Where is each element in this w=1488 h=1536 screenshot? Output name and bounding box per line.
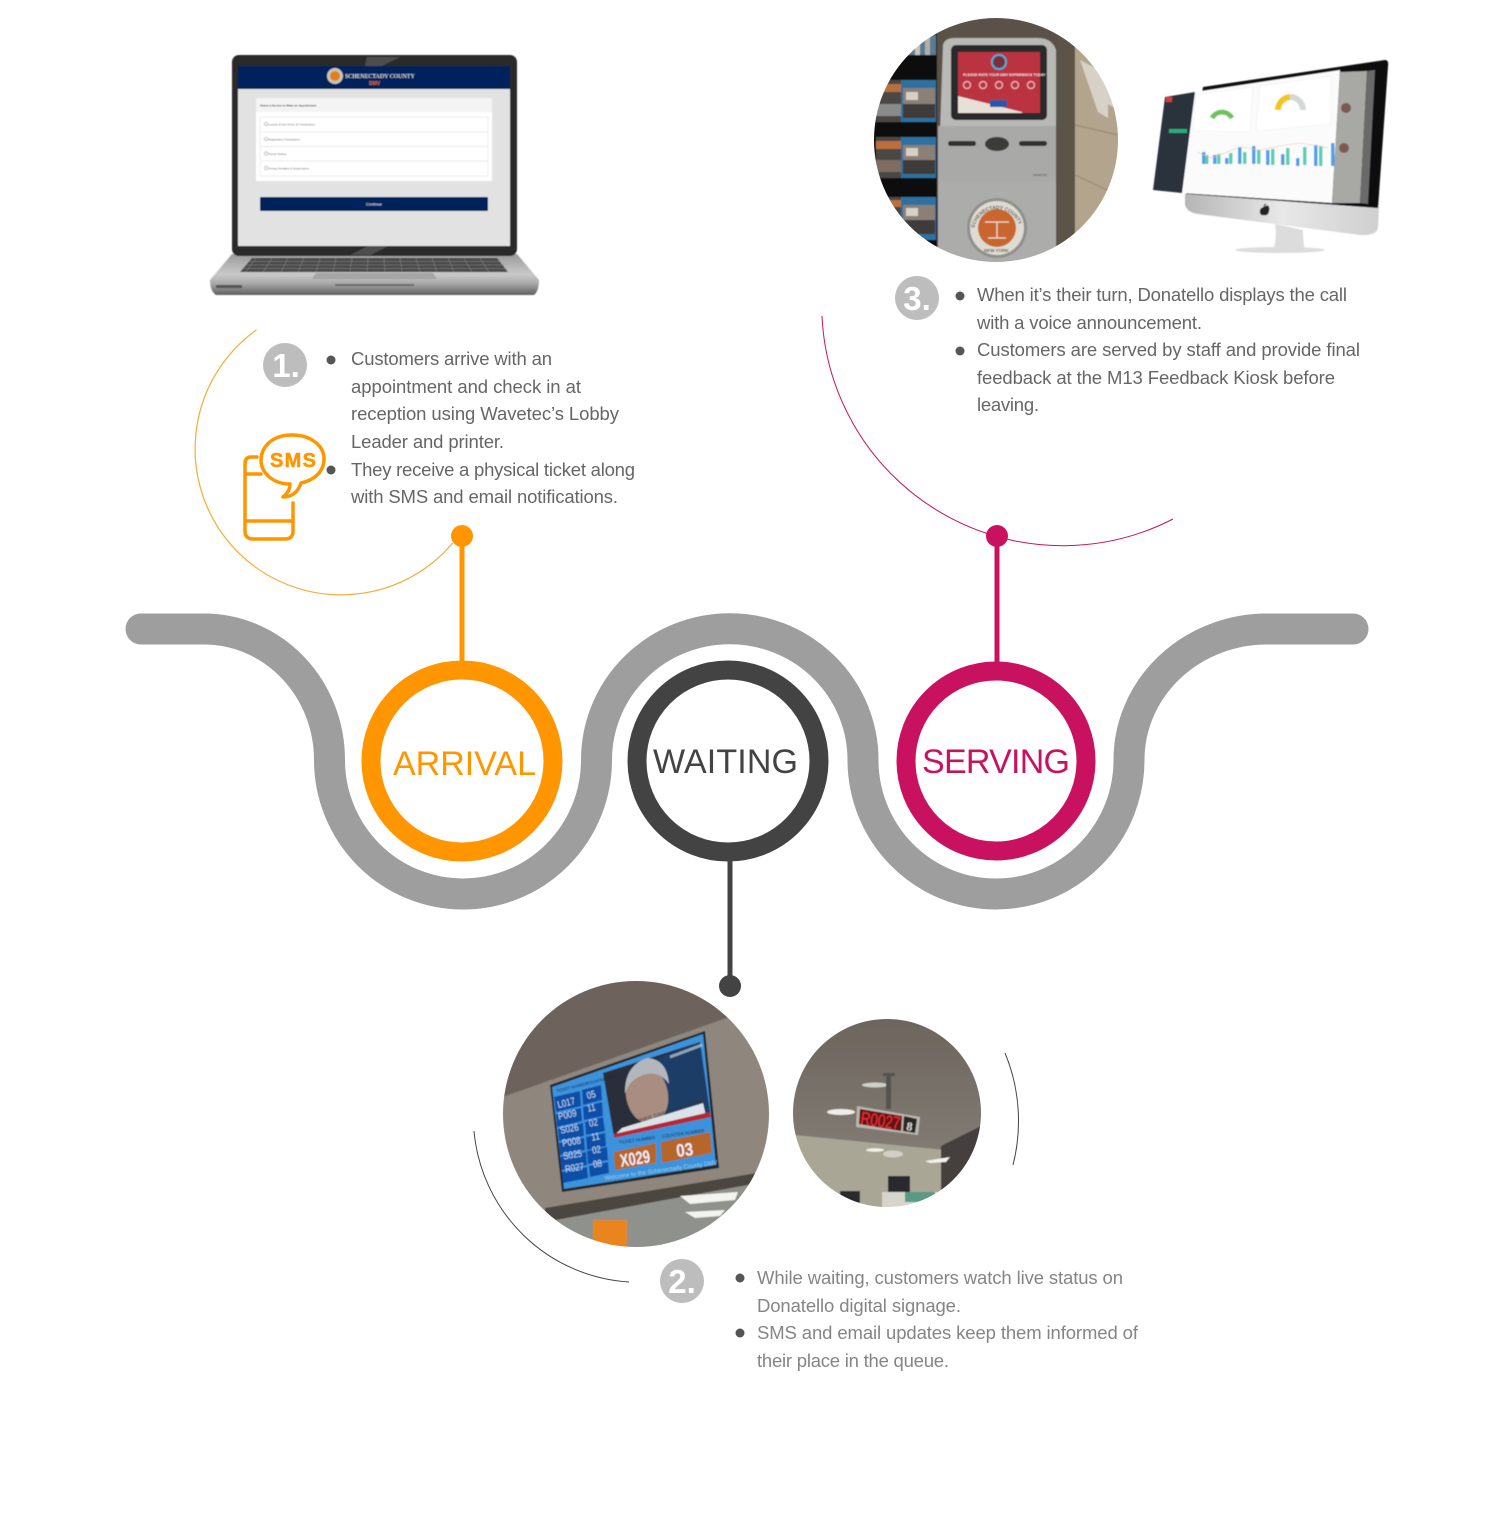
- text: step 3 bullets: Customers are served by staff and provide final: [977, 339, 1360, 360]
- digital signage photo: 11: [586, 1101, 597, 1114]
- digital signage photo: COUNTER NUMBER: [661, 1128, 705, 1139]
- digital signage photo: Welcome to the Schenectady County DMV: [604, 1160, 718, 1182]
- digital signage photo: P009: [557, 1107, 578, 1122]
- text: step 2 bullets: [736, 1267, 1139, 1371]
- arc: serving: [822, 316, 1173, 546]
- kiosk photo: PLEASE RATE YOUR DMV EXPERIENCE TODAY: [963, 73, 1046, 77]
- kiosk photo: [874, 18, 1118, 262]
- kiosk photo: NEW YORK: [984, 248, 1009, 253]
- text: step 1 bullets: [326, 348, 635, 507]
- laptop: appointment booking screen: License & Non Driver ID Transactions: [268, 122, 316, 126]
- digital signage photo: PRISONER SWAP WITH RUSSIA: [624, 1099, 706, 1129]
- badge: step 1: 1.: [272, 347, 300, 384]
- stage: waiting: WAITING: [653, 743, 798, 781]
- digital signage photo: COUNTER NO: [586, 1075, 613, 1086]
- text: step 3 bullets: [956, 284, 1360, 415]
- text: step 3 bullets: When it’s their turn, Donatello displays the call: [977, 284, 1347, 305]
- text: step 1 bullets: reception using Wavetec’s Lobby: [351, 403, 620, 424]
- digital signage photo: 03: [675, 1139, 694, 1161]
- wave track: [141, 629, 1353, 894]
- monitor: analytics dashboard: [1153, 60, 1388, 253]
- digital signage photo: 11: [590, 1131, 600, 1143]
- arc: waiting right: [1005, 1053, 1019, 1165]
- laptop: appointment booking screen: Continue: [366, 202, 383, 207]
- laptop: appointment booking screen: Select a Service to Make an Appointment: [260, 104, 316, 108]
- digital signage photo: TICKET NUMBER: [556, 1081, 589, 1093]
- laptop: appointment booking screen: [210, 55, 539, 295]
- digital signage photo: L017: [556, 1095, 576, 1110]
- stage: serving: SERVING: [922, 743, 1070, 781]
- stage: waiting: [637, 670, 819, 997]
- text: step 2 bullets: SMS and email updates keep them informed of: [757, 1322, 1139, 1343]
- text: step 3 bullets: feedback at the M13 Feedback Kiosk before: [977, 367, 1335, 388]
- text: step 1 bullets: Leader and printer.: [351, 431, 504, 452]
- text: step 2 bullets: Donatello digital signage.: [757, 1295, 961, 1316]
- badge: step 1: [263, 343, 307, 387]
- arc: arrival: [195, 330, 453, 595]
- laptop: appointment booking screen: Permit Testing: [268, 152, 287, 156]
- text: step 1 bullets: They receive a physical ticket along: [351, 459, 635, 480]
- digital signage photo: R027: [564, 1161, 585, 1175]
- digital signage photo: X029: [619, 1147, 652, 1172]
- laptop: appointment booking screen: Driving Penalties & Suspensions: [268, 166, 310, 170]
- kiosk photo: SCHENECTADY COUNTY: [970, 205, 1022, 228]
- badge: step 3: 3.: [903, 280, 931, 317]
- counter display photo: R0027: [859, 1109, 902, 1134]
- digital signage photo: 02: [591, 1144, 602, 1156]
- laptop: appointment booking screen: SCHENECTADY COUNTY: [345, 74, 415, 80]
- digital signage photo: 02: [588, 1116, 599, 1129]
- laptop: appointment booking screen: DMV: [369, 81, 381, 87]
- counter display photo: 8: [906, 1119, 913, 1134]
- stage: arrival: ARRIVAL: [393, 745, 536, 783]
- digital signage photo: S025: [562, 1148, 583, 1162]
- digital signage photo: 08: [592, 1158, 603, 1170]
- text: step 3 bullets: with a voice announcement.: [976, 312, 1202, 333]
- icon: SMS phone: SMS: [270, 450, 316, 472]
- text: step 3 bullets: leaving.: [977, 394, 1039, 415]
- arc: waiting left: [474, 1131, 629, 1282]
- laptop: appointment booking screen: Registration Transactions: [268, 137, 301, 141]
- digital signage photo: 05: [586, 1088, 597, 1101]
- icon: SMS phone: [245, 435, 324, 539]
- text: step 2 bullets: While waiting, customers watch live status on: [757, 1267, 1123, 1288]
- kiosk photo: WAVETEC: [1033, 173, 1048, 177]
- badge: step 3: [895, 276, 939, 320]
- digital signage photo: P008: [561, 1135, 582, 1149]
- stage: arrival: [371, 525, 553, 852]
- text: step 1 bullets: with SMS and email notifications.: [350, 486, 618, 507]
- text: step 1 bullets: appointment and check in at: [351, 376, 581, 397]
- badge: step 2: 2.: [668, 1263, 696, 1300]
- digital signage photo: TICKET NUMBER: [618, 1135, 656, 1145]
- stage: serving: [906, 525, 1086, 851]
- counter display photo: [790, 1018, 985, 1210]
- digital signage photo: S026: [559, 1122, 580, 1136]
- text: step 1 bullets: Customers arrive with an: [351, 348, 552, 369]
- digital signage photo: [500, 970, 775, 1250]
- text: step 2 bullets: their place in the queue.: [757, 1350, 949, 1371]
- badge: step 2: [660, 1259, 704, 1303]
